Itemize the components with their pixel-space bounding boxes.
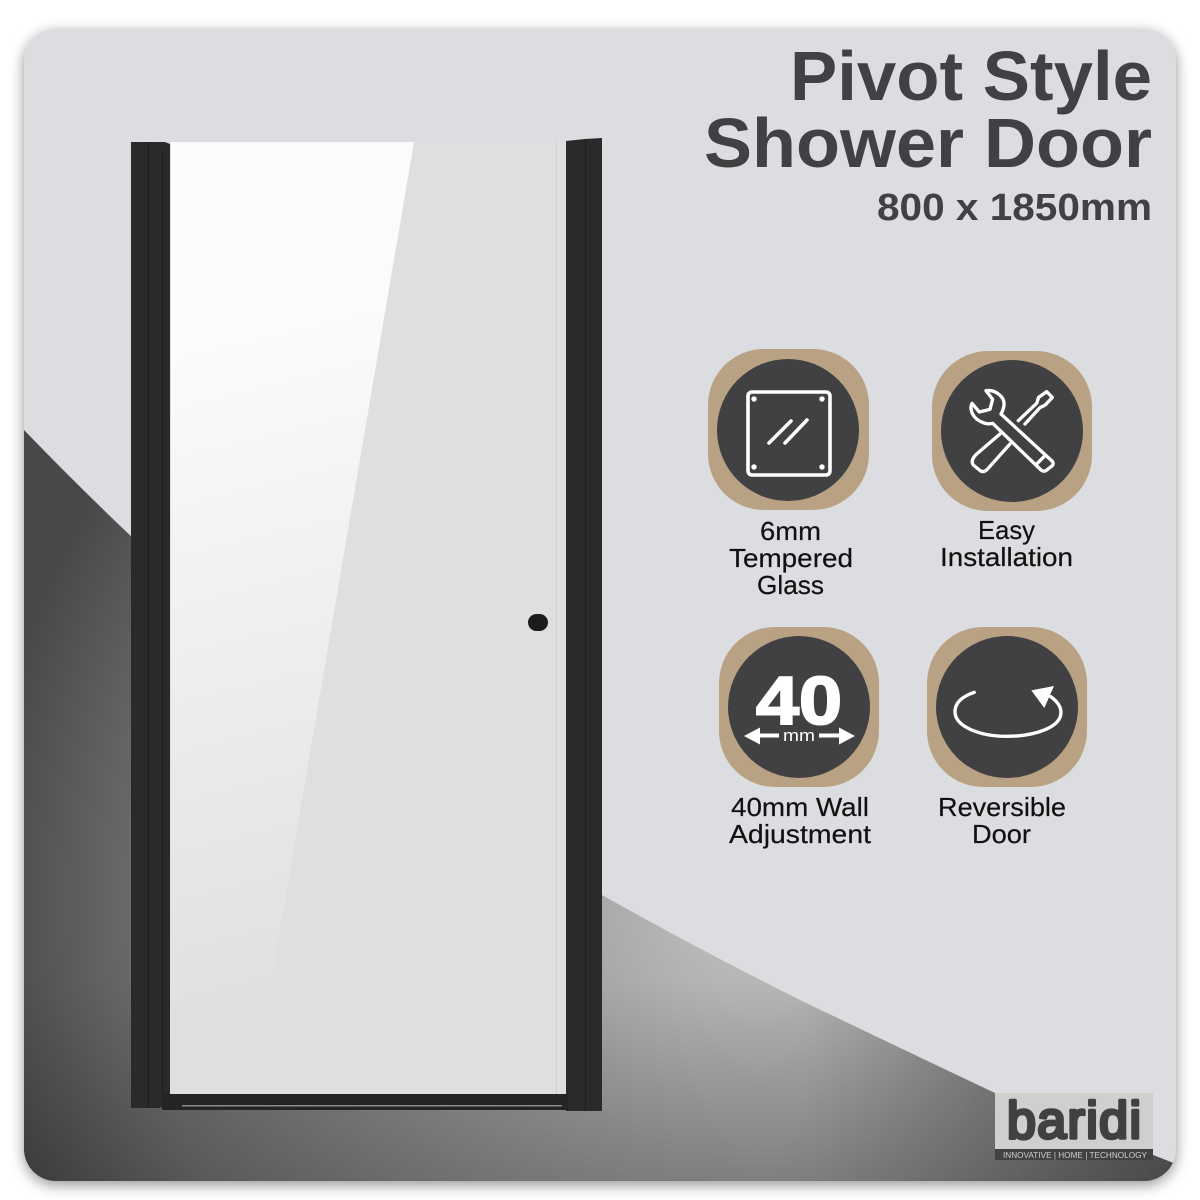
glass panel	[168, 142, 568, 1095]
icon: rotation arrow	[955, 686, 1061, 736]
feature: reversible door	[927, 627, 1087, 849]
label: Door	[972, 819, 1031, 849]
label	[940, 515, 1073, 572]
baridi logo	[995, 1092, 1153, 1160]
icon badge	[927, 627, 1087, 787]
label: Installation	[940, 542, 1073, 572]
glass highlight	[171, 142, 414, 1094]
icon badge	[708, 349, 869, 510]
label: Adjustment	[729, 819, 872, 849]
title: 800 x 1850mm	[877, 187, 1152, 229]
label	[729, 516, 853, 600]
icon badge	[932, 351, 1092, 511]
glass edge	[556, 142, 557, 1094]
icon: 40 mm arrows	[744, 663, 855, 745]
right wall profile	[566, 138, 602, 1111]
shower door	[131, 138, 602, 1111]
icon badge	[719, 627, 879, 787]
title	[704, 37, 1152, 229]
logo tagline bar	[995, 1149, 1153, 1160]
dark swoosh	[24, 430, 1176, 1181]
title: Pivot Style	[790, 37, 1152, 115]
logo wordmark: baridi	[1007, 1092, 1141, 1150]
icon: 40 mm arrows: mm	[783, 726, 815, 745]
label	[938, 792, 1066, 849]
rail highlight	[182, 1105, 562, 1106]
label: Easy	[978, 515, 1035, 545]
title: Shower Door	[704, 104, 1152, 182]
label	[729, 792, 872, 849]
handle knob	[528, 614, 548, 631]
label: Glass	[757, 570, 824, 600]
label: Reversible	[938, 792, 1066, 822]
logo tagline: INNOVATIVE | HOME | TECHNOLOGY	[1003, 1151, 1148, 1160]
feature: 6mm tempered glass	[708, 349, 869, 600]
icon: 40 mm arrows: 40	[756, 663, 842, 739]
label: 6mm	[760, 516, 821, 546]
label: 40mm Wall	[731, 792, 869, 822]
bottom rail	[162, 1094, 568, 1110]
feature: 40mm wall adjustment	[719, 627, 879, 849]
feature: easy installation	[932, 351, 1092, 572]
label: Tempered	[729, 543, 853, 573]
left wall profile	[131, 142, 170, 1108]
icon: glass pane	[748, 392, 830, 475]
icon: wrench and screwdriver	[971, 391, 1053, 472]
